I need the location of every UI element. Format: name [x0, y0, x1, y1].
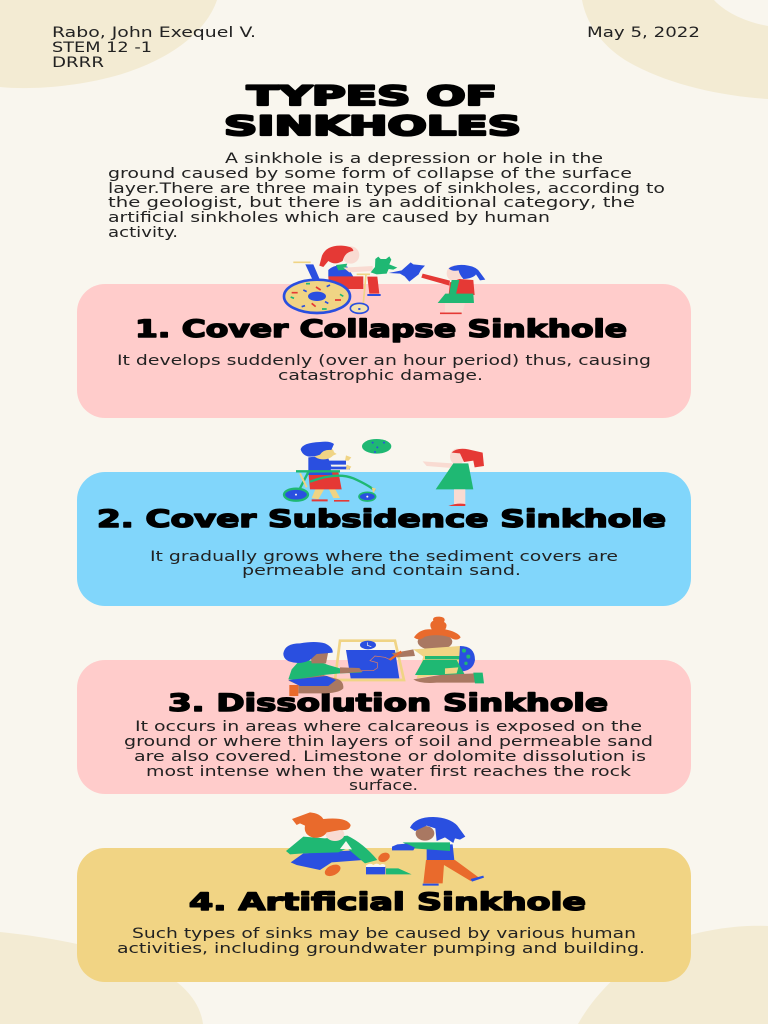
illustration: wheelchair child and friend with toys [284, 246, 485, 313]
description: dissolution: surface. [349, 778, 418, 794]
title: TYPES OF [247, 81, 497, 112]
description: dissolution: ground or where thin layers of soil and permeable sand [124, 734, 653, 750]
date: May 5, 2022 [587, 25, 700, 41]
illustration: two children playing with blocks [286, 812, 484, 886]
heading: cover subsidence: 2. Cover Subsidence Sinkhole [97, 505, 666, 533]
heading: cover collapse: 1. Cover Collapse Sinkhole [135, 315, 627, 343]
author details: DRRR [52, 55, 104, 71]
panel: cover subsidence sinkhole [77, 439, 691, 606]
illustration: child with walker and girl with ball [284, 439, 484, 506]
panel: dissolution sinkhole [77, 617, 691, 794]
description: artificial: activities, including groundwater pumping and building. [117, 941, 645, 957]
description: cover collapse: catastrophic damage. [278, 368, 483, 384]
description: artificial: Such types of sinks may be caused by various human [132, 926, 636, 942]
description: cover subsidence [150, 549, 618, 579]
intro text: artificial sinkholes which are caused by human [108, 210, 550, 226]
intro text: ground caused by some form of collapse of the surface [108, 166, 632, 182]
intro text: layer.There are three main types of sinkholes, according to [108, 181, 665, 197]
description: artificial [117, 926, 645, 957]
author details [52, 25, 256, 71]
description: cover subsidence: It gradually grows where the sediment covers are [150, 549, 618, 565]
description: dissolution: most intense when the water first reaches the rock [146, 764, 632, 780]
description: dissolution: It occurs in areas where calcareous is exposed on the [135, 719, 642, 735]
title: SINKHOLES [224, 111, 521, 142]
intro text: A sinkhole is a depression or hole in the [225, 151, 603, 167]
panel: artificial sinkhole [77, 812, 691, 982]
illustration: two children drawing on an easel [283, 617, 484, 696]
description: dissolution: are also covered. Limestone or dolomite dissolution is [134, 749, 646, 765]
heading: dissolution: 3. Dissolution Sinkhole [168, 689, 608, 717]
author details: STEM 12 -1 [52, 40, 152, 56]
heading: artificial: 4. Artificial Sinkhole [189, 888, 586, 916]
intro text: the geologist, but there is an additional category, the [108, 195, 635, 211]
panel: cover collapse sinkhole [77, 246, 691, 418]
description: cover subsidence: permeable and contain sand. [242, 563, 521, 579]
intro text [108, 151, 665, 241]
description: cover collapse [117, 353, 651, 384]
description: cover collapse: It develops suddenly (over an hour period) thus, causing [117, 353, 651, 369]
title [224, 81, 521, 142]
author details: Rabo, John Exequel V. [52, 25, 256, 41]
intro text: activity. [108, 225, 178, 241]
description: dissolution [124, 719, 653, 794]
